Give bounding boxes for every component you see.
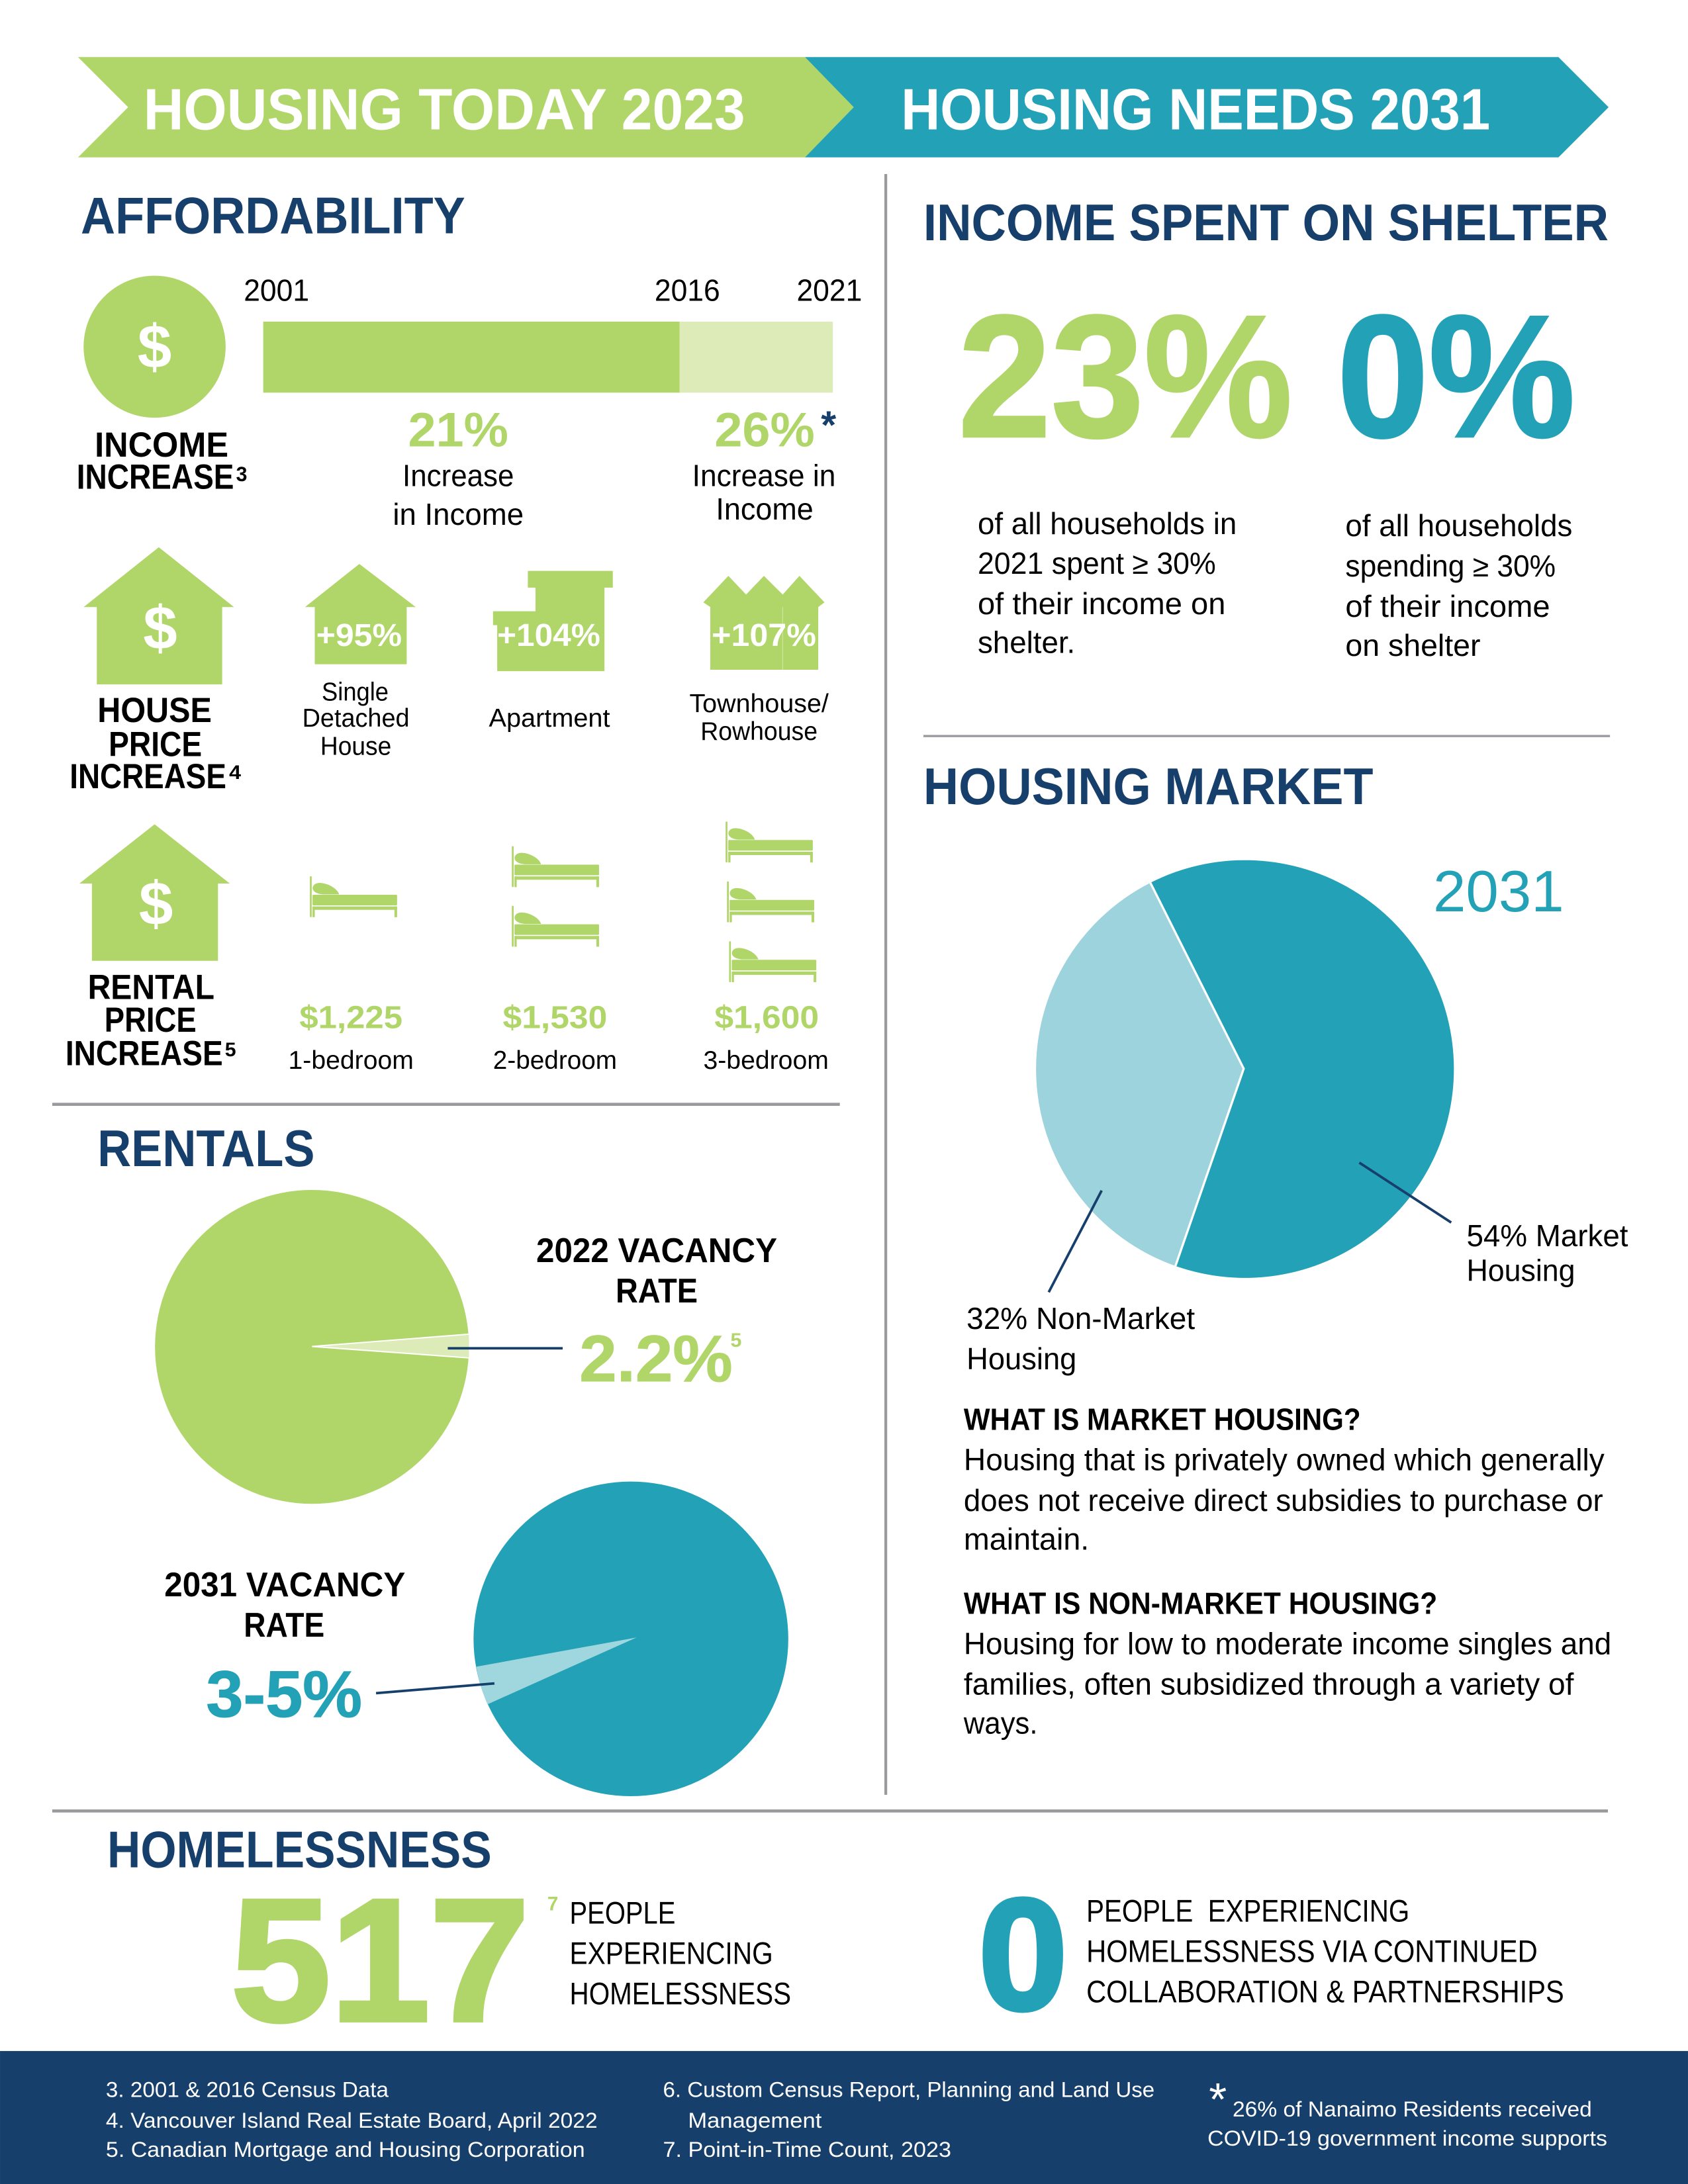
- stat: 21 percent income increase: [393, 402, 524, 531]
- text: sources 3 to 5: 4. Vancouver Island Real Estate Board, April 2022: [106, 2108, 598, 2132]
- icon: single detached house +95%: [305, 564, 416, 664]
- label: single detached house: House: [320, 732, 391, 760]
- stat: 21 percent income increase: in Income: [393, 497, 524, 531]
- stat: 0 percent: 0%: [1337, 279, 1575, 474]
- panel: housing market: [923, 758, 1628, 1740]
- label: 2022 vacancy rate: [536, 1231, 777, 1395]
- stat: 26 percent income increase: *: [821, 404, 836, 447]
- icon: one bed: [310, 876, 397, 917]
- banner: [78, 57, 1609, 158]
- text: sources 3 to 5: 3. 2001 & 2016 Census Data: [106, 2077, 389, 2102]
- text: what is non-market housing: Housing for low to moderate income singles and: [964, 1626, 1611, 1661]
- chart: housing market pie: [1036, 860, 1454, 1292]
- label: 32 percent non-market housing: [966, 1301, 1195, 1376]
- label: townhouse rowhouse: [689, 690, 829, 746]
- banner: housing today: [78, 57, 854, 158]
- stat: 2-bedroom rent: [493, 1000, 617, 1075]
- text: covid income supports note: 26% of Nanaimo Residents received: [1233, 2097, 1592, 2121]
- label: house price increase: PRICE: [109, 725, 202, 764]
- icon: townhouse +107%: +107%: [712, 617, 816, 653]
- label: 2022 vacancy rate: 5: [731, 1330, 741, 1351]
- label: 2031 vacancy rate: [164, 1565, 405, 1731]
- text: sources 6 to 7: 6. Custom Census Report, Planning and Land Use: [663, 2077, 1154, 2102]
- text: sources 3 to 5: [106, 2077, 598, 2161]
- text: 517 description: EXPERIENCING: [570, 1936, 773, 1972]
- text: 23 percent description: shelter.: [978, 625, 1075, 660]
- label: single detached house: Detached: [303, 704, 410, 733]
- stat: 0: 0: [978, 1866, 1068, 2043]
- text: sources 6 to 7: [663, 2077, 1154, 2161]
- heading: affordability: AFFORDABILITY: [81, 187, 465, 244]
- label: rental price increase: RENTAL: [88, 968, 214, 1007]
- heading: housing market: HOUSING MARKET: [923, 758, 1373, 815]
- stat: 3-bedroom rent: [704, 1000, 829, 1075]
- text: sources 6 to 7: Management: [688, 2108, 821, 2132]
- label: 32 percent non-market housing: 32% Non-Market: [966, 1301, 1195, 1336]
- icon: income dollar circle: [83, 276, 226, 418]
- text: 0 percent description: on shelter: [1345, 628, 1480, 662]
- text: 0 percent description: of all households: [1345, 508, 1572, 543]
- banner: housing today: HOUSING TODAY 2023: [144, 77, 745, 142]
- banner: housing needs: HOUSING NEEDS 2031: [901, 77, 1490, 142]
- panel: affordability: [66, 187, 862, 1075]
- stat: 517: 517: [231, 1863, 530, 2058]
- label: income increase: INCREASE: [77, 457, 234, 496]
- text: 0 description: [1086, 1893, 1564, 2009]
- label: 32 percent non-market housing: Housing: [966, 1342, 1076, 1376]
- text: 23 percent description: of their income on: [978, 586, 1225, 621]
- chart: 2031 vacancy pie: [376, 1482, 788, 1796]
- stat: 3-bedroom rent: $1,600: [714, 1000, 819, 1036]
- label: 2022 vacancy rate: RATE: [616, 1271, 698, 1310]
- text: 517 description: HOMELESSNESS: [570, 1977, 791, 2012]
- label: rental price increase: 5: [225, 1039, 236, 1061]
- text: what is market housing: WHAT IS MARKET HOUSING?: [964, 1402, 1361, 1437]
- icon: apartment +104%: +104%: [497, 617, 600, 653]
- text: 23 percent description: 2021 spent ≥ 30%: [978, 546, 1216, 580]
- panel: income spent on shelter: [923, 195, 1609, 662]
- heading: rentals: RENTALS: [97, 1120, 315, 1177]
- text: what is market housing: does not receive direct subsidies to purchase or: [964, 1483, 1603, 1518]
- label: house price increase: INCREASE: [70, 757, 226, 796]
- label: townhouse rowhouse: Townhouse/: [689, 690, 829, 718]
- stat: 26 percent income increase: 26%: [714, 402, 815, 457]
- label: rental price increase: [66, 968, 236, 1073]
- label: apartment: Apartment: [489, 704, 610, 733]
- stat: 21 percent income increase: 21%: [408, 402, 508, 457]
- label: house price increase: 4: [229, 762, 242, 784]
- text: 23 percent description: [978, 506, 1237, 660]
- stat: 21 percent income increase: Increase: [402, 458, 514, 492]
- text: covid income supports note: [1207, 2073, 1607, 2150]
- icon: house price: $: [143, 593, 177, 662]
- stat: 2-bedroom rent: $1,530: [503, 1000, 607, 1036]
- stat: 26 percent income increase: [692, 402, 836, 526]
- label: 54 percent market housing: 54% Market: [1466, 1218, 1628, 1253]
- text: what is non-market housing: WHAT IS NON-MARKET HOUSING?: [964, 1586, 1437, 1620]
- label: house price increase: HOUSE: [97, 691, 212, 730]
- icon: rental price: $: [139, 869, 173, 938]
- chart: income timeline bar: [244, 273, 862, 392]
- icon: two beds: [512, 846, 599, 946]
- chart: income timeline bar: 2001: [244, 273, 309, 307]
- label: 2031 vacancy rate: 2031 VACANCY: [164, 1565, 405, 1604]
- label: income increase: [77, 426, 247, 496]
- icon: house price: [83, 547, 234, 684]
- panel: rentals: [97, 1120, 788, 1796]
- label: rental price increase: INCREASE: [66, 1034, 223, 1073]
- label: house price increase: [70, 691, 242, 796]
- stat: 23 percent: 23%: [959, 279, 1292, 474]
- chart: income timeline bar: 2021: [796, 273, 862, 307]
- stat: 26 percent income increase: Increase in: [692, 458, 835, 492]
- text: 0 description: HOMELESSNESS VIA CONTINUED: [1086, 1934, 1538, 1969]
- icon: three beds: [726, 821, 816, 982]
- text: 0 description: COLLABORATION & PARTNERSHIPS: [1086, 1974, 1564, 2009]
- heading: homelessness: HOMELESSNESS: [107, 1821, 492, 1878]
- text: 23 percent description: of all households in: [978, 506, 1237, 541]
- label: 54 percent market housing: [1466, 1218, 1628, 1288]
- text: 517 description: PEOPLE: [570, 1896, 675, 1931]
- label: income increase: 3: [236, 462, 247, 486]
- text: sources 3 to 5: 5. Canadian Mortgage and Housing Corporation: [106, 2137, 585, 2161]
- text: what is non-market housing: ways.: [963, 1706, 1037, 1740]
- chart: income timeline bar: 2016: [655, 273, 720, 307]
- chart: 2022 vacancy pie: [155, 1190, 563, 1504]
- stat: 2-bedroom rent: 2-bedroom: [493, 1046, 617, 1075]
- banner: housing needs: [805, 57, 1609, 158]
- text: covid income supports note: *: [1209, 2073, 1227, 2125]
- text: what is market housing: [964, 1402, 1605, 1557]
- text: 0 percent description: spending ≥ 30%: [1345, 549, 1556, 583]
- icon: income dollar circle: $: [138, 312, 171, 381]
- text: covid income supports note: COVID-19 government income supports: [1207, 2126, 1607, 2150]
- label: single detached house: Single: [322, 678, 389, 706]
- label: 2022 vacancy rate: 2022 VACANCY: [536, 1231, 777, 1269]
- text: what is non-market housing: families, often subsidized through a variety of: [964, 1666, 1574, 1701]
- label: 54 percent market housing: Housing: [1466, 1253, 1575, 1288]
- text: sources 6 to 7: 7. Point-in-Time Count, 2023: [663, 2137, 951, 2161]
- stat: 1-bedroom rent: [289, 1000, 414, 1075]
- heading: income spent on shelter: INCOME SPENT ON SHELTER: [923, 195, 1609, 251]
- label: townhouse rowhouse: Rowhouse: [700, 717, 818, 746]
- icon: townhouse +107%: [704, 576, 825, 670]
- text: what is non-market housing: [963, 1586, 1611, 1740]
- stat: 26 percent income increase: Income: [716, 492, 814, 526]
- label: single detached house: [303, 678, 410, 760]
- panel: footer: [0, 2051, 1688, 2184]
- text: 0 percent description: of their income: [1345, 589, 1550, 623]
- text: what is market housing: maintain.: [964, 1522, 1089, 1557]
- label: 2031 vacancy rate: 3-5%: [206, 1657, 362, 1731]
- stat: 3-bedroom rent: 3-bedroom: [704, 1046, 829, 1075]
- icon: single detached house +95%: +95%: [316, 617, 402, 653]
- text: 517 description: [570, 1896, 791, 2012]
- icon: rental price: [79, 825, 230, 961]
- icon: apartment +104%: [493, 571, 613, 671]
- label: 2031: 2031: [1433, 858, 1564, 924]
- panel: homelessness: [107, 1821, 1564, 2058]
- stat: 517: 7: [547, 1893, 558, 1915]
- text: what is market housing: Housing that is privately owned which generally: [964, 1443, 1605, 1477]
- text: 0 description: PEOPLE EXPERIENCING: [1086, 1893, 1409, 1929]
- stat: 1-bedroom rent: 1-bedroom: [289, 1046, 414, 1075]
- label: rental price increase: PRICE: [105, 1001, 197, 1040]
- stat: 1-bedroom rent: $1,225: [299, 1000, 402, 1036]
- label: 2031 vacancy rate: RATE: [244, 1606, 324, 1644]
- text: 0 percent description: [1345, 508, 1572, 662]
- label: income increase: INCOME: [95, 426, 228, 465]
- label: 2022 vacancy rate: 2.2%: [579, 1322, 733, 1395]
